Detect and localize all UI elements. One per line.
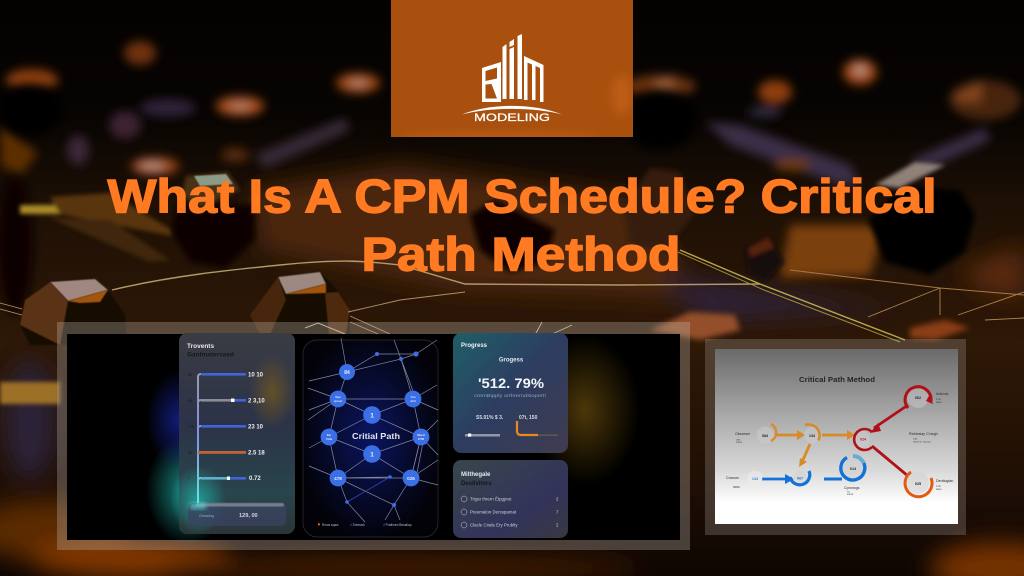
total row: 129, 00 [239, 513, 258, 519]
node labels: Axticuls [936, 392, 949, 396]
card: milestone activities: Clacle Cirale Ery Prublty [470, 522, 518, 528]
node labels: 1601S S. Thesater [913, 440, 931, 444]
light horizontal streak [0, 193, 172, 404]
card: milestone activities: Trigsr Ihrern Ëtpgprst [470, 496, 512, 502]
card: milestone activities: Preemalon Dersspamat [470, 510, 517, 514]
card: events timeline: 7 [188, 476, 190, 480]
title: What Is A CPM Schedule? Critical [108, 170, 936, 222]
panel: critical path method diagram: 025 [915, 482, 921, 486]
phone: critical path network: Mced [417, 433, 425, 437]
panel: dashboard mockup [57, 322, 690, 550]
card: events timeline: 0.72 [249, 476, 261, 482]
card: events timeline: Ganlmatersaed [187, 352, 234, 358]
node labels: Rethesiay C'rargh [909, 432, 938, 436]
card: milestone activities: Milthegale [461, 472, 491, 478]
total row [188, 503, 286, 526]
phone: critical path network: 1 [370, 452, 374, 458]
node labels: 40229 [847, 494, 854, 496]
network lines [0, 250, 1024, 342]
node labels: Cpronxgs [844, 486, 860, 490]
phone: critical path network: 1 [370, 412, 374, 420]
phone: critical path network: alrd [410, 399, 416, 403]
phone: critical path network: Critial Path [352, 431, 400, 441]
card: milestone activities: 2 [556, 522, 559, 528]
node labels: 00060. [733, 486, 741, 489]
card: events timeline: 2.5 18 [248, 450, 265, 456]
title [108, 170, 936, 280]
card: events timeline: Trovents [187, 343, 214, 350]
diagram heading: Critical Path Method [799, 375, 875, 384]
card: progress [453, 333, 568, 453]
phone legend: Rewa sqaw [322, 523, 339, 527]
card: milestone activities: 7 [556, 510, 559, 514]
logo panel [391, 0, 633, 147]
panel: critical path method diagram [705, 339, 966, 535]
phone: critical path network: 84 [344, 370, 350, 376]
phone legend: √ Sremark [350, 523, 365, 527]
card: milestone activities: Desilvitors [461, 481, 492, 487]
total row: Greasing [199, 514, 214, 518]
phone: critical path network: 2758 [418, 437, 425, 441]
node labels: 5.82 [913, 438, 918, 440]
phone: critical path network: 478 [334, 476, 342, 481]
phone legend: √ Prathsed Besallap [383, 523, 412, 527]
dark blurred spheres [0, 84, 696, 315]
phone: critical path network: 026 [407, 476, 415, 481]
node labels: Obsxeser [735, 432, 751, 436]
card: events timeline: 23 10 [248, 424, 264, 430]
panel: critical path method diagram: 024 [860, 438, 867, 442]
node labels: KTID [936, 399, 941, 401]
card: events timeline: 2 3,10 [248, 398, 265, 404]
icon: building logo [462, 34, 562, 114]
node labels: 10202 [736, 442, 743, 444]
title: Path Method [362, 228, 680, 280]
node labels [726, 392, 953, 496]
logo wordmark: MODELING [474, 112, 550, 124]
phone: critical path network: Yoo [410, 395, 416, 399]
card: events timeline: 95 [188, 399, 192, 403]
phone: critical path network: Yelle [326, 437, 333, 441]
card: events timeline: 10 10 [248, 372, 264, 378]
panel: critical path method diagram: 067 [797, 476, 803, 480]
phone: critical path network [303, 338, 438, 537]
card: progress: Progress [461, 343, 488, 349]
card: events timeline [170, 333, 295, 534]
card: progress: Grogess [499, 358, 524, 364]
card: progress: S5.01% $ 3. [476, 415, 504, 421]
panel: critical path method diagram: 062 [915, 396, 921, 400]
panel: critical path method diagram: 134 [809, 434, 816, 438]
card: milestone activities: 2 [556, 496, 559, 502]
card: progress: 07t, 150 [519, 415, 538, 421]
panel: critical path method diagram: 084 [762, 434, 769, 438]
card: events timeline: 30 [188, 451, 192, 455]
phone: critical path network: Ope [335, 395, 341, 399]
node labels: Dentlogtan [936, 479, 953, 483]
node labels: M350 [936, 402, 942, 404]
panel: critical path method diagram: 014 [850, 467, 857, 471]
phone legend [318, 523, 412, 527]
arrows [762, 405, 908, 479]
card: events timeline: 779 [188, 425, 194, 429]
card: milestone activities [453, 460, 568, 538]
card: events timeline: 80 [188, 373, 192, 377]
node labels: eXB [736, 440, 741, 442]
card: progress: '512. 79% [478, 375, 545, 391]
node labels: KTID [936, 486, 941, 488]
sharp polyhedra [20, 162, 975, 345]
nodes [748, 386, 929, 494]
node labels: M350 [936, 489, 942, 491]
phone: critical path network: oprest [334, 399, 342, 403]
node labels: Tar [847, 490, 850, 494]
node labels: Cranum [726, 476, 739, 480]
phone: critical path network: Em [327, 433, 332, 437]
card: progress: cremBipply orthrerndsiopert! [474, 393, 546, 398]
panel: critical path method diagram: 134 [752, 477, 759, 481]
